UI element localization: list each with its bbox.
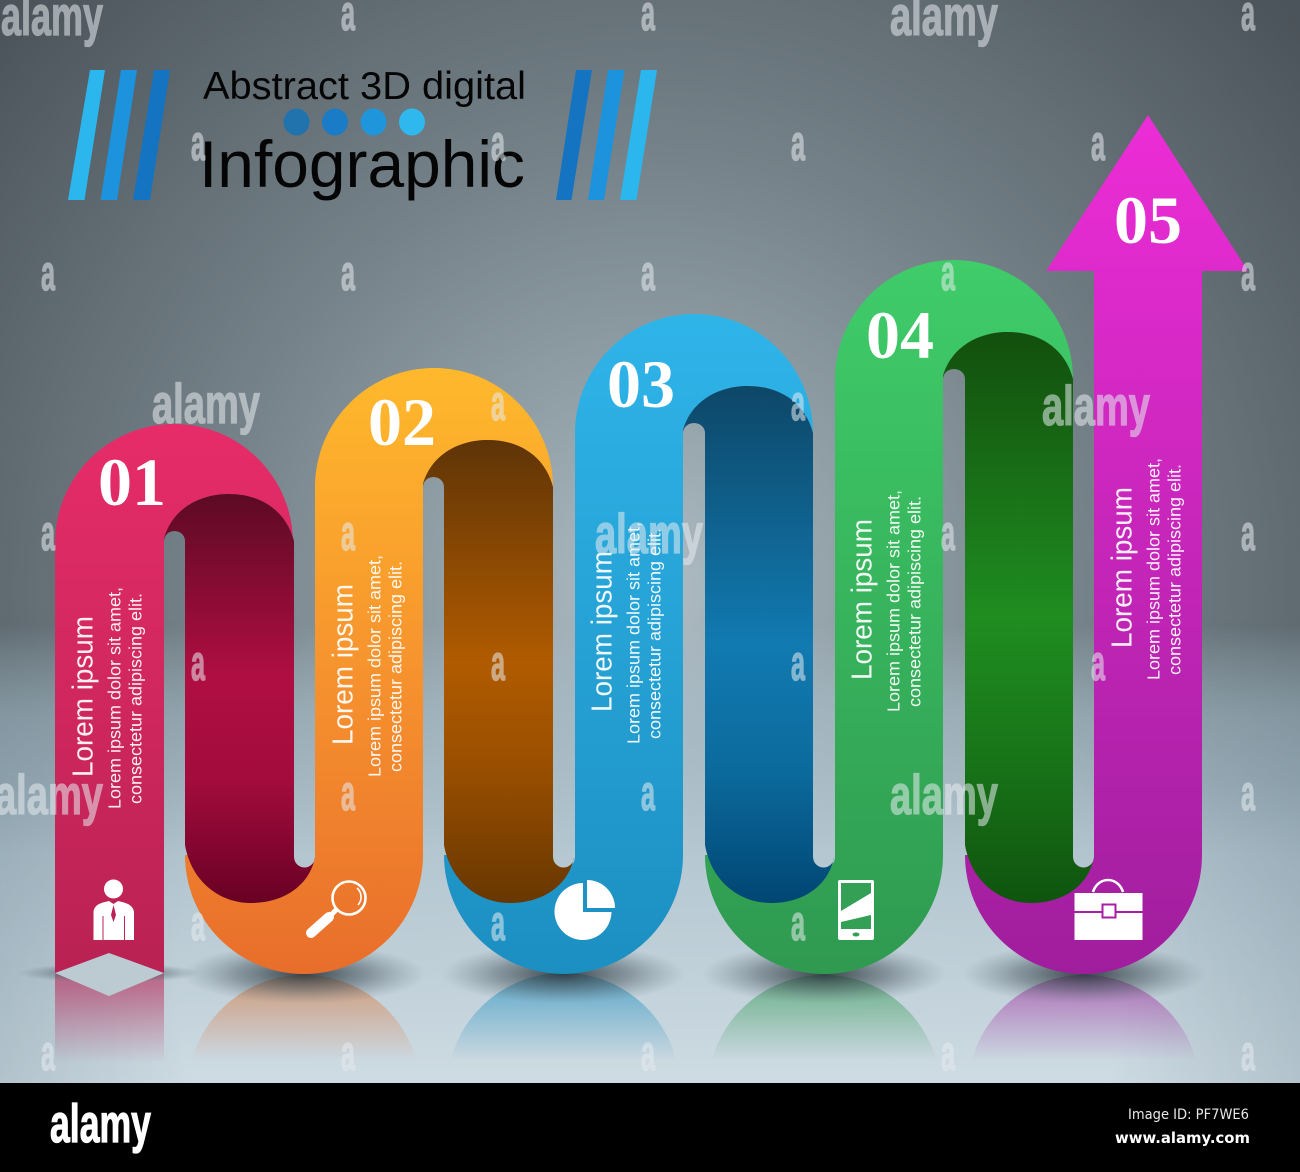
text: step 03: Lorem ipsum [586,551,618,712]
icon: briefcase [1074,880,1142,940]
watermarks: alamy [595,502,703,565]
watermarks: a [941,245,956,301]
watermarks: a [191,895,206,951]
watermarks: a [791,115,806,171]
number 03: 03 [607,346,675,422]
text: step 02: Lorem ipsum dolor sit amet, [364,555,384,777]
heading: Abstract 3D digital: Abstract 3D digital [203,65,526,108]
watermarks: a [1241,245,1256,301]
step 02: orange ribbon [185,368,574,974]
watermarks: a [941,1025,956,1081]
dark orange inner fold [423,440,574,903]
watermarks: a [1091,635,1106,691]
watermarks: alamy [890,763,998,826]
pink ribbon band [55,424,294,973]
text: step 05: consectetur adipiscing elit. [1164,464,1184,675]
watermarks: a [1241,765,1256,821]
icon: businessman [94,880,134,940]
text: step 04: consectetur adipiscing elit. [904,496,924,707]
green ribbon band [705,260,1073,974]
watermarks: a [41,1025,56,1081]
watermarks: a [1241,505,1256,561]
watermarks: a [791,375,806,431]
watermarks: a [641,765,656,821]
watermarks: a [341,505,356,561]
watermarks: a [341,1025,356,1081]
four blue dots [284,108,425,136]
watermarks: a [941,505,956,561]
text: step 04 [846,490,924,712]
text: step 04: Lorem ipsum [846,519,878,680]
watermarks: a [491,635,506,691]
watermarks: a [491,375,506,431]
right blue stripes [556,70,657,200]
text: step 01: Lorem ipsum [68,616,100,777]
text: step 02 [328,555,406,777]
watermarks: a [41,505,56,561]
text: step 03: Lorem ipsum dolor sit amet, [624,522,644,744]
watermarks: a [1091,115,1106,171]
text: step 01: consectetur adipiscing elit. [126,593,146,804]
title block [68,65,657,201]
orange ribbon band [185,368,553,974]
contact shadows [17,944,1206,1004]
text: step 03: consectetur adipiscing elit. [644,528,664,739]
number 05: 05 [1114,182,1182,258]
text: step 05 [1106,458,1184,680]
floor diamond under the ribbon tail [55,953,164,996]
icon: magnifying glass [311,882,366,933]
text: step 05: Lorem ipsum [1106,487,1138,648]
dark pink inner fold [164,494,315,903]
watermarks: a [341,245,356,301]
icon: smartphone [838,880,874,940]
step 01: pink ribbon [55,424,315,996]
purple arrow ribbon [965,115,1248,974]
watermarks: a [191,115,206,171]
left blue stripes [68,70,170,200]
watermarks: a [191,635,206,691]
text: step 01: Lorem ipsum dolor sit amet, [104,587,124,809]
watermarks: a [641,1025,656,1081]
watermarks: a [791,895,806,951]
heading: Infographic: Infographic [199,127,525,201]
watermarks: a [41,245,56,301]
text: step 02: consectetur adipiscing elit. [386,561,406,772]
footer bar [0,1083,1300,1172]
text: step 01 [68,587,146,809]
watermarks: a [791,635,806,691]
dark blue inner fold [683,386,834,903]
text: step 03 [586,522,664,744]
blue ribbon band [444,314,813,974]
step 04: green ribbon [705,260,1094,974]
text: step 04: Lorem ipsum dolor sit amet, [884,490,904,712]
watermarks: alamy [152,372,260,435]
website: www.alamy.com [1115,1129,1250,1147]
icon: pie chart [555,880,615,940]
step 05: purple arrow [965,115,1248,974]
watermarks: a [641,245,656,301]
dark green inner fold [943,332,1094,903]
text: step 05: Lorem ipsum dolor sit amet, [1144,458,1164,680]
text: step 02: Lorem ipsum [328,584,360,745]
number 04: 04 [866,297,934,373]
image id: Image ID: PF7WE6 [1128,1107,1249,1123]
watermarks: alamy [1042,374,1150,437]
number 01: 01 [98,444,166,520]
footer logo: alamy [50,1094,151,1154]
watermarks: a [491,895,506,951]
watermarks: a [491,115,506,171]
watermarks: a [341,765,356,821]
watermarks: a [1241,1025,1256,1081]
floor reflections [55,973,1197,1063]
number 02: 02 [368,384,436,460]
step 03: blue ribbon [444,314,834,974]
